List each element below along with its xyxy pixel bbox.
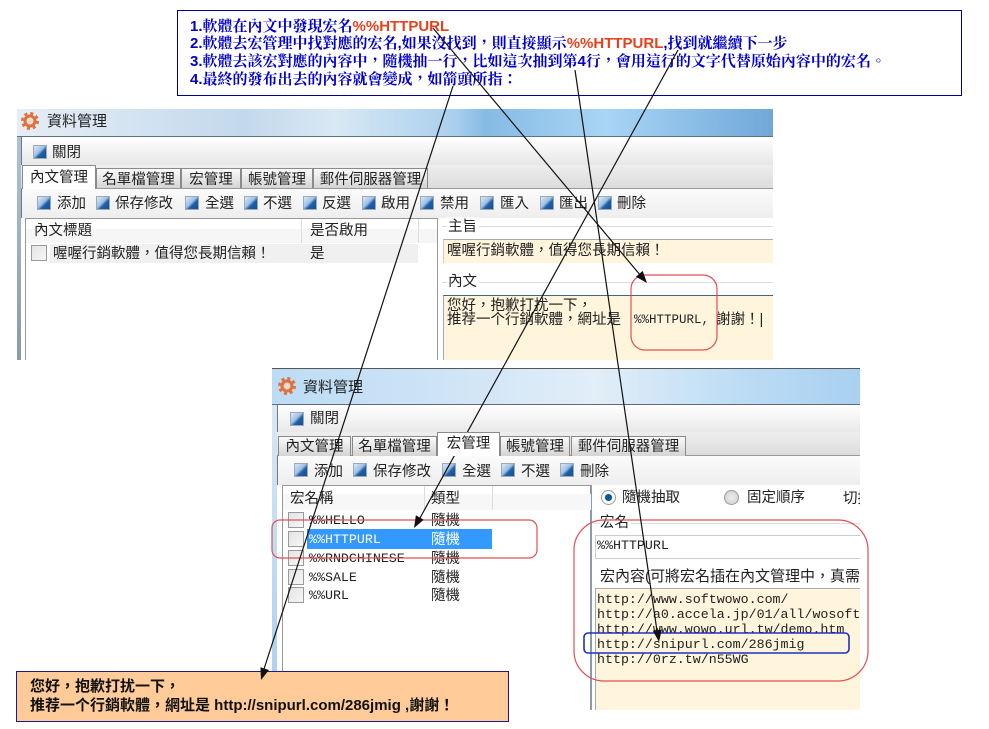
- title bar: [17, 109, 773, 137]
- form: body text: 推荐一个行銷軟體，網址是: [447, 312, 621, 328]
- arrow: step 4 to final text: [260, 86, 453, 680]
- icon: gear: [278, 377, 296, 395]
- left window edge: [272, 405, 277, 710]
- list: macro names: %%SALE: [309, 570, 357, 585]
- toolbar: content actions: 全選: [205, 196, 234, 212]
- window title: 資料管理: [303, 379, 363, 396]
- tab: content: 內文管理: [30, 170, 88, 186]
- highlight: chosen URL line: [584, 633, 849, 653]
- tab: content: [22, 165, 96, 189]
- form: macro content: http://www.wowo.url.tw/demo.htm: [597, 622, 844, 637]
- form: macro content: http://snipurl.com/286jmig: [597, 637, 804, 652]
- icon: close: [33, 145, 47, 159]
- form: subject: 喔喔行銷軟體，值得您長期信賴！: [447, 243, 664, 259]
- highlight: selected macro row: [272, 520, 537, 558]
- arrow: step 1 to body text: [433, 28, 647, 283]
- list: macro names: 隨機: [431, 551, 460, 567]
- tab: list files: [352, 436, 437, 456]
- toolbar: content actions: 禁用: [440, 196, 469, 212]
- left window edge: [17, 137, 21, 360]
- toolbar: content actions: 反選: [322, 196, 351, 212]
- toolbar: macro actions: 添加: [314, 464, 343, 480]
- tab strip: [21, 165, 773, 189]
- step 2: 2.軟體去宏管理中找對應的宏名,如果沒找到，則直接顯示%%HTTPURL,找到就繼續下一步: [190, 35, 788, 52]
- toolbar: content actions: 保存修改: [115, 196, 173, 212]
- arrow: step 3 to chosen URL: [575, 70, 662, 642]
- tab: macros: 宏管理: [189, 172, 233, 188]
- tab: mail servers: 郵件伺服器管理: [578, 439, 679, 455]
- form: body text: 您好，抱歉打扰一下，: [447, 298, 592, 314]
- title bar: [272, 369, 860, 405]
- form: body text: 內文: [448, 274, 477, 290]
- panel: macro management window screenshot: [272, 368, 860, 710]
- highlight: macro name and content: [574, 520, 868, 681]
- list: macro names: %%URL: [309, 588, 349, 603]
- form: subject: [441, 218, 773, 268]
- panel: content management window screenshot: [17, 109, 773, 360]
- list: macro names: [282, 485, 592, 710]
- tab: macros active: [437, 432, 500, 456]
- tab: accounts: [241, 168, 313, 188]
- tab: list files: 名單檔管理: [358, 439, 431, 455]
- callout line 2: 推荐一个行銷軟體，網址是 http://snipurl.com/286jmig ,謝謝！: [30, 697, 454, 714]
- toolbar: content actions: 添加: [57, 196, 86, 212]
- form: macro content: http://www.softwowo.com/: [597, 592, 789, 607]
- list: content titles: 內文標題: [34, 223, 92, 239]
- radio: fixed order: [724, 490, 739, 505]
- list: macro names: %%HELLO: [309, 513, 365, 528]
- list: macro names: %%RNDCHINESE: [309, 551, 405, 566]
- list: content titles: 是: [310, 246, 324, 262]
- form: macro content: http://a0.accela.jp/01/all/wosoft: [597, 607, 860, 622]
- list: macro names: 宏名稱: [290, 491, 334, 507]
- toolbar: content actions: 匯入: [500, 196, 529, 212]
- toolbar: content actions: 不選: [263, 196, 292, 212]
- tab: macros: [181, 168, 241, 188]
- toolbar: content actions: 刪除: [617, 196, 646, 212]
- list: content titles: 喔喔行銷軟體，值得您長期信賴！: [53, 246, 270, 262]
- list: macro names: 隨機: [431, 532, 460, 548]
- step 1: 1.軟體在內文中發現宏名%%HTTPURL: [190, 18, 449, 35]
- tab: accounts: [500, 436, 570, 456]
- tab: content: [278, 436, 351, 456]
- tab: mail servers: 郵件伺服器管理: [320, 172, 421, 188]
- toolbar: macro actions: 刪除: [580, 464, 609, 480]
- list: macro names: 類型: [431, 491, 460, 507]
- list: macro names: 隨機: [431, 588, 460, 604]
- arrow: step 2 to macro row: [414, 50, 678, 528]
- window title: 資料管理: [47, 113, 107, 130]
- callout: final published text: [16, 671, 509, 722]
- tab: macros active: 宏管理: [447, 436, 490, 452]
- step 3: 3.軟體去該宏對應的內容中，隨機抽一行，比如這次抽到第4行，會用這行的文字代替原始內容中的宏名。: [190, 53, 886, 70]
- icon: close: [290, 412, 304, 426]
- radio options: [592, 485, 860, 511]
- radio: random, selected: [601, 490, 616, 505]
- toolbar: content actions: [21, 189, 773, 218]
- radio options: 固定順序: [747, 490, 805, 506]
- toolbar: macro actions: 保存修改: [373, 464, 431, 480]
- tab: list files: [96, 168, 181, 188]
- tab: accounts: 帳號管理: [506, 439, 564, 455]
- toolbar: content actions: 匯出: [559, 196, 588, 212]
- panel: top explanation steps: [177, 10, 962, 96]
- toolbar: content actions: 啟用: [381, 196, 410, 212]
- form: macro content: http://0rz.tw/n55WG: [597, 652, 749, 667]
- tab: accounts: 帳號管理: [248, 172, 306, 188]
- form: macro name: %%HTTPURL: [597, 538, 669, 553]
- tab: list files: 名單檔管理: [102, 172, 175, 188]
- tab: content: 內文管理: [286, 439, 344, 455]
- list: macro names: %%HTTPURL: [309, 532, 381, 547]
- selected row highlight: [307, 529, 492, 549]
- radio options: 隨機抽取: [622, 490, 680, 506]
- callout line 1: 您好，抱歉打扰一下，: [30, 678, 180, 695]
- toolbar: macro actions: 全選: [462, 464, 491, 480]
- list: content titles: 是否啟用: [310, 223, 368, 239]
- form: subject: 主旨: [448, 219, 477, 235]
- form: body text: [441, 271, 773, 360]
- form: macro content: [592, 566, 860, 710]
- form: body text: 謝謝！|: [716, 312, 763, 328]
- form: macro name: 宏名: [600, 515, 629, 531]
- toolbar: macro actions: [277, 456, 860, 485]
- toolbar: close: [277, 404, 860, 435]
- form: body text: %%HTTPURL,: [634, 313, 709, 327]
- form: macro name: [592, 511, 860, 566]
- label: close: 關閉: [52, 145, 81, 161]
- list: macro names: 隨機: [431, 513, 460, 529]
- toolbar: close: [21, 137, 773, 166]
- list: macro names: 隨機: [431, 570, 460, 586]
- step 4: 4.最終的發布出去的內容就會變成，如箭頭所指：: [190, 71, 518, 88]
- highlight: %%HTTPURL in body text: [631, 275, 717, 350]
- icon: gear: [21, 112, 39, 130]
- toolbar: macro actions: 不選: [521, 464, 550, 480]
- label: close: 關閉: [310, 411, 339, 427]
- list: content titles: [25, 218, 438, 360]
- tab strip: [277, 432, 860, 456]
